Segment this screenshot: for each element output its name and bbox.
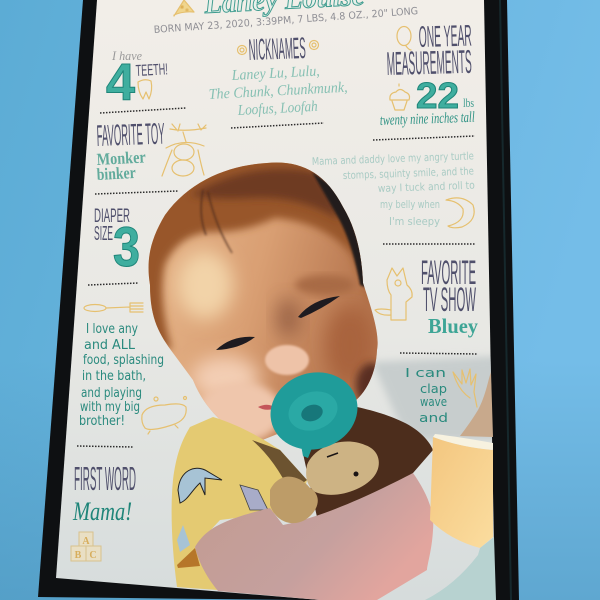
note text: way I tuck and roll to	[378, 180, 475, 195]
show name: Bluey	[428, 314, 478, 338]
hair crown shadow	[190, 169, 340, 220]
skills text: and	[419, 411, 448, 425]
baby face	[148, 162, 378, 440]
teddy paw	[270, 477, 318, 523]
monkey toy body	[300, 407, 433, 517]
height text: twenty nine inches tall	[380, 110, 475, 129]
teddy closed eye	[327, 453, 338, 457]
panel: I can	[405, 366, 477, 425]
pacifier stem	[301, 445, 312, 458]
pacifier	[260, 361, 368, 461]
icon: bathtub	[142, 396, 186, 434]
orange patch	[177, 548, 200, 568]
icon: alphabet blocks	[71, 532, 101, 561]
hand reflection	[460, 372, 493, 437]
note text	[312, 150, 475, 228]
food text: and ALL	[84, 338, 136, 353]
food text: I love any	[86, 322, 138, 337]
icon: fork	[84, 303, 143, 312]
panel: diaper size: SIZE	[94, 223, 113, 245]
lamp rim	[433, 434, 493, 450]
weight 22: 22	[416, 75, 459, 116]
panel: favorite toy: FAVORITE TOY	[96, 118, 165, 153]
hair strands	[201, 190, 232, 253]
arm	[195, 473, 433, 600]
lbs unit: lbs	[463, 95, 474, 110]
icon: alphabet blocks: A	[82, 536, 90, 547]
nicknames text: The Chunk, Chunkmunk,	[208, 80, 348, 103]
food text: brother!	[79, 414, 125, 429]
I have label: I have	[111, 48, 142, 63]
panel: diaper size	[94, 206, 140, 278]
shirt	[172, 417, 307, 590]
icon: hand	[453, 369, 477, 407]
lamp base	[425, 537, 496, 600]
icon: alphabet blocks: C	[89, 550, 97, 561]
teddy head	[306, 442, 379, 495]
teddy toy	[270, 442, 379, 523]
food text	[79, 322, 164, 429]
number 3: 3	[113, 215, 140, 278]
bunny print	[178, 468, 222, 503]
skills text	[405, 366, 448, 425]
diaper heading: DIAPER	[94, 206, 130, 227]
pacifier hole	[299, 402, 325, 424]
icon: cupcake	[390, 84, 410, 110]
icon: moon	[446, 198, 474, 228]
first word value: Mama!	[72, 497, 132, 526]
poster paper	[56, 0, 495, 600]
skills text: wave	[420, 395, 447, 409]
face skin	[149, 163, 378, 445]
chin	[202, 382, 278, 440]
bunny print right	[240, 485, 268, 510]
yellow shirt	[172, 417, 307, 590]
birth details: BORN MAY 23, 2020, 3:39PM, 7 LBS, 4.8 OZ., 20" LONG	[153, 6, 419, 36]
panel: nicknames: NICKNAMES	[248, 32, 306, 67]
collar shadow	[252, 440, 307, 492]
hair	[148, 162, 367, 352]
left cheek	[191, 356, 259, 400]
panel: one year measurements	[380, 20, 475, 129]
food text: in the bath,	[82, 369, 146, 384]
note text: my belly when	[380, 199, 440, 211]
teddy eye	[354, 472, 358, 476]
icon: Bluey dog	[375, 268, 412, 320]
icon: alphabet blocks: B	[75, 550, 82, 561]
note text: Mama and daddy love my angry turtle	[312, 150, 474, 168]
icon: monkey	[162, 124, 206, 176]
lower right edge	[352, 358, 376, 400]
lamp shade	[430, 437, 493, 548]
panel: teeth	[106, 48, 168, 112]
panel: favorite toy	[96, 118, 206, 184]
nicknames text: Loofus, Loofah	[236, 99, 318, 119]
lamp reflection	[425, 434, 496, 600]
number 4: 4	[106, 54, 135, 112]
bunny print lower	[177, 525, 190, 552]
title and birth details	[153, 0, 419, 36]
panel: favorite tv show	[375, 254, 478, 338]
paper reflection	[372, 356, 500, 440]
icon: spirals	[238, 40, 318, 54]
nicknames text	[208, 63, 348, 119]
panel: first word	[71, 460, 136, 561]
framed poster photo: ONE YEAR	[418, 20, 472, 54]
panel: food	[79, 303, 186, 434]
pacifier shield	[260, 361, 368, 461]
food text: food, splashing	[83, 353, 164, 368]
framed poster photo: TV SHOW	[423, 281, 476, 319]
food text: with my big	[80, 400, 140, 415]
teeth label: TEETH!	[135, 61, 168, 80]
left eye	[216, 337, 255, 350]
icon: balloon	[397, 26, 411, 50]
nicknames text: Laney Lu, Lulu,	[230, 63, 320, 84]
note text: stomps, squinty smile, and the	[343, 165, 474, 182]
right eye	[298, 296, 340, 318]
eye socket shadow	[276, 298, 300, 338]
forehead highlight	[177, 251, 233, 319]
frame highlight	[499, 0, 512, 600]
icon: tooth	[138, 80, 152, 99]
food text: and playing	[81, 386, 142, 401]
note text: I'm sleepy	[389, 216, 440, 228]
framed poster photo: FIRST WORD	[74, 460, 136, 497]
toy name: Monker	[96, 147, 147, 169]
lips	[258, 405, 276, 410]
face shading	[148, 162, 378, 440]
dark hair right	[312, 172, 365, 289]
panel: nicknames	[208, 32, 348, 119]
skills text: I can	[405, 366, 446, 380]
panel: personality note	[312, 150, 475, 228]
skills text: clap	[420, 382, 447, 396]
nose	[265, 345, 309, 375]
pacifier inner ring	[283, 385, 343, 437]
icon: pizza slice	[174, 0, 194, 16]
toy name second line: binker	[96, 163, 137, 184]
right eye shadow	[295, 275, 355, 295]
framed poster photo: FAVORITE	[421, 254, 476, 292]
right cheek shadow	[326, 307, 374, 383]
